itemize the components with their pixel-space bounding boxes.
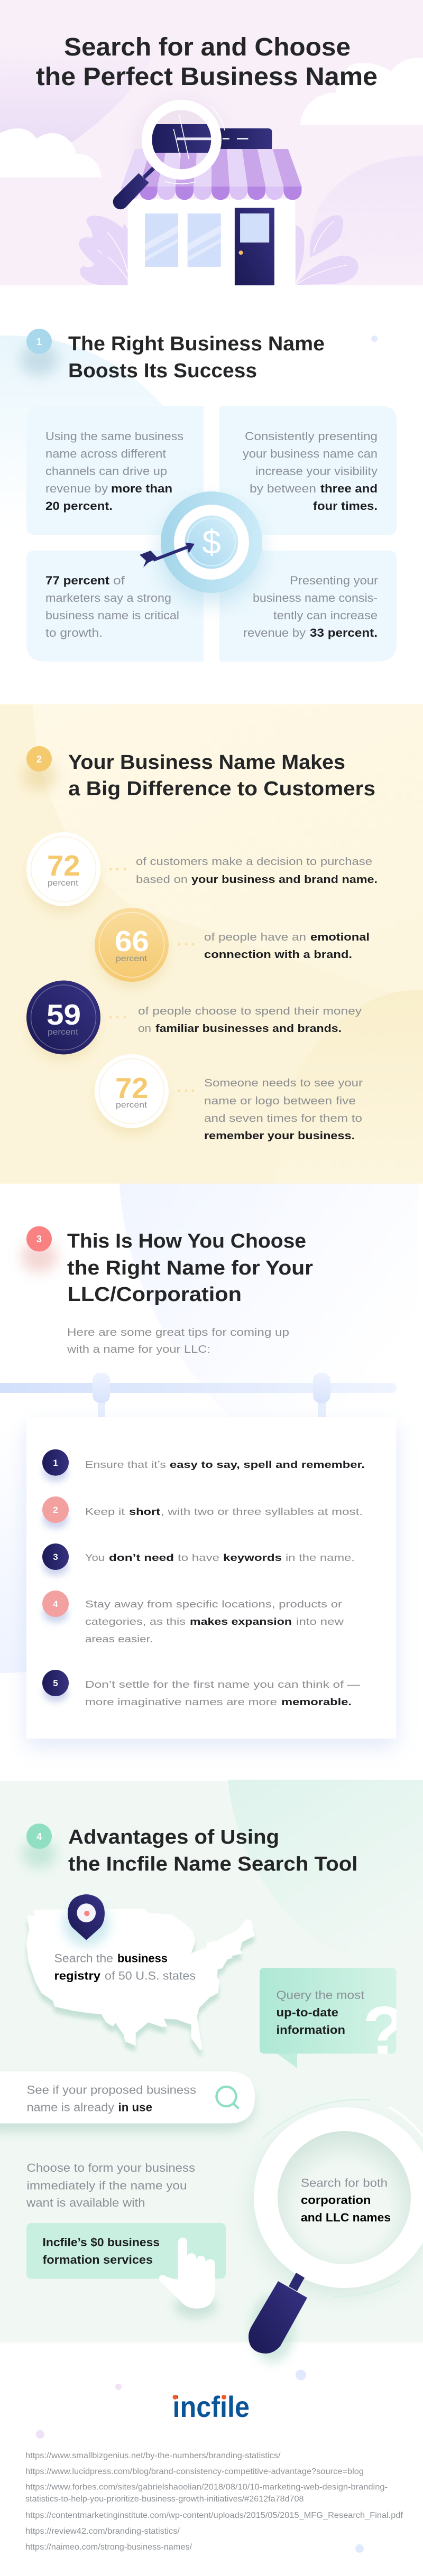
- badge 2: [22, 746, 56, 791]
- callout: up-to-date information: up-to-date: [276, 2006, 338, 2019]
- search bar: [0, 2071, 255, 2131]
- magnifier text: and LLC names: [301, 2211, 391, 2224]
- callout: up-to-date information: ?: [363, 1992, 406, 2070]
- intro text: with a name for your LLC:: [67, 1344, 210, 1355]
- heading 4: the Incfile Name Search Tool: [68, 1853, 357, 1875]
- tip 3: in the name.: [286, 1552, 355, 1563]
- stat: 72 percent purchase: percent: [48, 879, 79, 888]
- panel: section 4: [0, 1780, 423, 2342]
- arrow: [140, 543, 195, 568]
- map: United States: of 50 U.S. states: [105, 1969, 196, 1983]
- tip 4: makes expansion: [190, 1616, 292, 1627]
- heading 3: [67, 1230, 313, 1306]
- heading 1: The Right Business Name: [68, 333, 325, 355]
- sources list: https://www.lucidpress.com/blog/brand-consistency-competitive-advantage?source=blog: [25, 2467, 364, 2476]
- magnifier lens: [143, 105, 225, 184]
- logo: incfile: incfile: [172, 2390, 250, 2423]
- map: United States: business: [117, 1952, 168, 1965]
- card: 33 percent: [219, 551, 397, 662]
- card: visibility: [219, 406, 397, 535]
- stat: 72 percent purchase: of customers make a decision to purchase: [136, 856, 372, 868]
- heading 2: Your Business Name Makes: [68, 751, 345, 774]
- tip 3: 3: [53, 1552, 58, 1562]
- tip 4: 4: [53, 1599, 58, 1609]
- map: United States: Search the: [54, 1952, 113, 1965]
- tip 5: 5: [53, 1678, 58, 1688]
- card: 33 percent: 33 percent.: [310, 626, 378, 639]
- badge 3: [21, 1226, 57, 1272]
- tip 2: , with two or three syllables at most.: [161, 1506, 363, 1517]
- callout: up-to-date information: information: [276, 2023, 345, 2036]
- card: visibility: Consistently presenting: [245, 430, 378, 443]
- tip 1: 1: [53, 1458, 58, 1468]
- card: same name: more than: [111, 482, 172, 495]
- decorative dots: [36, 2369, 364, 2553]
- panel: footer: [0, 2342, 423, 2576]
- tip 5: Don’t settle for the first name you can think of —: [85, 1679, 360, 1690]
- tip 1: Ensure that it’s: [85, 1459, 166, 1470]
- icon: search: [217, 2087, 238, 2108]
- form business text: Choose to form your business: [26, 2161, 195, 2174]
- card: 33 percent: tently can increase: [273, 609, 378, 622]
- decorative dot: [371, 336, 378, 342]
- stat: 59 percent familiar: familiar businesses and brands.: [155, 1023, 342, 1035]
- sources list: https://www.smallbizgenius.net/by-the-numbers/branding-statistics/: [25, 2451, 281, 2460]
- panel: section 2: [0, 704, 423, 1184]
- panel: hero header: [0, 0, 423, 285]
- card: visibility: three and: [320, 482, 378, 495]
- stat: 59 percent familiar: percent: [48, 1028, 79, 1037]
- map: United States: [26, 1894, 255, 2057]
- building: [128, 199, 295, 285]
- card: visibility: by between: [250, 482, 316, 495]
- stat: 66 percent emotional: of people have an: [204, 932, 306, 943]
- tip 3: don’t need: [109, 1552, 174, 1563]
- card: same name: 20 percent.: [45, 499, 113, 513]
- stat: 66 percent emotional: percent: [116, 954, 148, 963]
- form business text: want is available with: [26, 2196, 145, 2209]
- form business text: immediately if the name you: [26, 2179, 187, 2192]
- card: 77 percent: [26, 551, 204, 662]
- tip 4: categories, as this: [85, 1616, 186, 1627]
- stat: 72 percent remember: Someone needs to see your: [204, 1077, 363, 1089]
- tip 4: Stay away from specific locations, products or: [85, 1599, 342, 1610]
- tip 2: Keep it: [85, 1506, 125, 1517]
- magnifier handle: [113, 166, 155, 209]
- tip 5: [42, 1670, 360, 1707]
- title: the Perfect Business Name: [36, 63, 378, 91]
- card: 77 percent: to growth.: [45, 626, 103, 639]
- card: visibility: your business name can: [243, 447, 378, 460]
- tip 4: into new: [296, 1616, 344, 1627]
- button: formation services: Incfile’s $0 business: [42, 2236, 160, 2249]
- stat: 66 percent emotional: connection with a brand.: [204, 949, 352, 961]
- tip 3: [42, 1543, 355, 1576]
- tip 2: [42, 1496, 363, 1529]
- search bar: in use: [118, 2101, 152, 2114]
- magnifier text: Search for both: [301, 2176, 388, 2190]
- tip 4: [42, 1591, 344, 1644]
- sources list: https://review42.com/branding-statistics/: [25, 2527, 180, 2536]
- heading 1: Boosts Its Success: [68, 360, 257, 382]
- card: 33 percent: revenue by: [243, 626, 306, 639]
- card: same name: [26, 406, 204, 535]
- stat: 66 percent emotional: emotional: [310, 932, 370, 943]
- stat: 66 percent emotional: 66: [115, 925, 149, 957]
- tip 2: 2: [53, 1505, 58, 1515]
- stat: 72 percent remember: remember your business.: [204, 1130, 355, 1142]
- card: 77 percent: 77 percent: [45, 574, 110, 587]
- panel: section 1: [0, 285, 423, 705]
- badge 4: [22, 1824, 56, 1868]
- windows: [145, 213, 221, 267]
- tip 5: memorable.: [281, 1697, 352, 1707]
- card: same name: name across different: [45, 447, 166, 460]
- tip 2: short: [129, 1506, 160, 1517]
- card: 77 percent: business name is critical: [45, 609, 179, 622]
- tip 4: areas easier.: [85, 1634, 153, 1644]
- magnifier text: corporation: [301, 2193, 371, 2207]
- heading 1: [68, 333, 325, 382]
- button: formation services: [26, 2223, 226, 2279]
- hero background shapes and clouds: [0, 0, 423, 285]
- panel: section 3: [0, 1184, 423, 1781]
- badge 2: 2: [36, 754, 42, 765]
- heading 4: Advantages of Using: [68, 1826, 279, 1848]
- stat: 66 percent emotional: [95, 908, 370, 988]
- callout: up-to-date information: [260, 1968, 406, 2070]
- title: Search for and Choose: [64, 33, 351, 61]
- card: visibility: increase your visibility: [255, 464, 378, 478]
- heading 2: a Big Difference to Customers: [68, 778, 375, 800]
- icon: plants: [79, 215, 358, 285]
- door: [235, 208, 274, 285]
- icon: target with dollar coin: $: [202, 523, 221, 561]
- hanging rail: [0, 1373, 397, 1421]
- tip 3: keywords: [223, 1552, 282, 1563]
- sources list: [25, 2451, 403, 2552]
- intro text: Here are some great tips for coming up: [67, 1327, 289, 1338]
- heading 3: This Is How You Choose: [67, 1230, 306, 1252]
- tip 3: You: [85, 1552, 105, 1563]
- sources list: statistics-to-help-you-prioritize-business-growth-initiatives/#2612fa78d708: [25, 2495, 304, 2504]
- tip 3: to have: [178, 1552, 219, 1563]
- stat: 59 percent familiar: of people choose to spend their money: [138, 1006, 362, 1017]
- icon: target with dollar coin: [160, 491, 262, 603]
- badge 3: 3: [36, 1234, 42, 1244]
- tip 5: more imaginative names are more: [85, 1697, 277, 1707]
- badge 1: 1: [36, 337, 42, 347]
- card: 77 percent: of: [113, 574, 125, 587]
- stat: 72 percent remember: and seven times for them to: [204, 1113, 362, 1124]
- card: same name: Using the same business: [45, 430, 183, 443]
- badge 4: 4: [36, 1831, 42, 1842]
- map: United States: registry: [54, 1969, 101, 1983]
- stat: 72 percent purchase: your business and brand name.: [191, 874, 378, 886]
- sources list: https://www.forbes.com/sites/gabrielshaoolian/2018/08/10/10-marketing-web-design-branding-: [25, 2482, 388, 2492]
- heading 3: the Right Name for Your: [67, 1257, 313, 1279]
- card: 33 percent: Presenting your: [290, 574, 378, 587]
- stat: 72 percent purchase: based on: [136, 874, 188, 886]
- card: visibility: four times.: [313, 499, 378, 513]
- search bar: name is already: [26, 2101, 114, 2114]
- stat: 59 percent familiar: on: [138, 1023, 151, 1035]
- tip 1: [42, 1449, 365, 1482]
- awning: [122, 149, 301, 200]
- title: [36, 33, 378, 91]
- sources list: https://contentmarketinginstitute.com/wp-content/uploads/2015/05/2015_MFG_Research_Final.pdf: [25, 2511, 403, 2520]
- stat: 72 percent remember: 72: [115, 1072, 148, 1104]
- intro text: [67, 1327, 289, 1355]
- button: formation services: formation services: [42, 2253, 153, 2266]
- sources list: https://naimeo.com/strong-business-names/: [25, 2543, 192, 2552]
- stat: 72 percent remember: name or logo between five: [204, 1095, 356, 1107]
- panel: tips list: [26, 1417, 397, 1746]
- magnifier text: [301, 2176, 391, 2224]
- stat: 59 percent familiar: [26, 981, 362, 1061]
- card: 77 percent: marketers say a strong: [45, 591, 171, 605]
- search bar: See if your proposed business: [26, 2083, 196, 2097]
- tip 1: easy to say, spell and remember.: [170, 1459, 365, 1470]
- stat: 59 percent familiar: 59: [47, 998, 81, 1031]
- card: same name: channels can drive up: [45, 464, 167, 478]
- icon: large magnifying glass: [249, 2100, 423, 2363]
- shop sign: [210, 128, 272, 149]
- callout: up-to-date information: Query the most: [276, 1988, 364, 2002]
- badge 1: [20, 329, 58, 376]
- icon: location pin: [63, 1894, 109, 1946]
- stat: 72 percent purchase: 72: [47, 849, 80, 882]
- illustration: storefront: [79, 103, 358, 285]
- card: 33 percent: business name consis-: [253, 591, 378, 605]
- card: same name: revenue by: [45, 482, 108, 495]
- heading 2: [68, 751, 375, 800]
- heading 3: LLC/Corporation: [68, 1284, 242, 1306]
- stat: 72 percent purchase: [26, 832, 378, 913]
- icon: pointing hand: [159, 2238, 217, 2318]
- stat: 72 percent remember: [95, 1054, 363, 1142]
- form business text: [26, 2161, 195, 2209]
- stat: 72 percent remember: percent: [116, 1101, 148, 1110]
- heading 4: [68, 1826, 357, 1875]
